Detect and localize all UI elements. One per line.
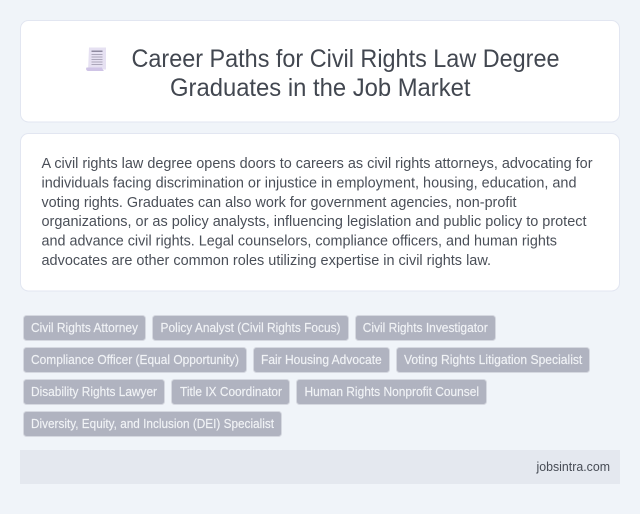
tag: Disability Rights Lawyer: Disability Rights Lawyer — [31, 385, 157, 399]
tag: Civil Rights Attorney — [24, 316, 146, 340]
description text: voting rights. Graduates can also work for government agencies, non-profit — [42, 194, 517, 211]
tag: Human Rights Nonprofit Counsel: Human Rights Nonprofit Counsel — [304, 385, 479, 399]
description text: and advance civil rights. Legal counselors, compliance officers, and human rights — [42, 232, 557, 250]
title: Graduates in the Job Market — [170, 74, 471, 102]
tag: Compliance Officer — [24, 348, 246, 372]
tag: Title IX Coordinator — [172, 380, 290, 404]
description text: advocates are other common roles utilizing expertise in civil rights law. — [42, 252, 491, 269]
tag: Civil Rights Investigator — [356, 316, 496, 340]
tag: DEI Specialist: Diversity, Equity, and Inclusion (DEI) Specialist — [31, 417, 274, 431]
tag: Civil Rights Attorney: Civil Rights Attorney — [31, 321, 139, 335]
tag: DEI Specialist — [24, 412, 282, 436]
description panel — [20, 134, 620, 291]
description text: A civil rights law degree opens doors to careers as civil rights attorneys, advocating for — [42, 155, 592, 172]
tag: Fair Housing Advocate — [254, 348, 390, 372]
tag: Compliance Officer: Compliance Officer (Equal Opportunity) — [31, 353, 239, 367]
description text: individuals facing discrimination or injustice in employment, housing, education, and — [42, 174, 576, 192]
title — [132, 45, 560, 102]
title: Career Paths for Civil Rights Law Degree — [132, 45, 560, 73]
tag: Policy Analyst — [152, 316, 348, 340]
description text — [42, 155, 592, 269]
tag: Civil Rights Investigator: Civil Rights Investigator — [363, 321, 488, 335]
tag: Voting Rights Litigation Specialist — [396, 348, 590, 372]
icon: paper scroll — [86, 48, 106, 71]
job role tags — [24, 316, 590, 436]
tag: Policy Analyst: Policy Analyst (Civil Rights Focus) — [160, 321, 340, 335]
tag: Fair Housing Advocate: Fair Housing Advocate — [261, 353, 382, 367]
tag: Human Rights Nonprofit Counsel — [296, 380, 486, 404]
tag: Voting Rights Litigation Specialist: Voting Rights Litigation Specialist — [404, 353, 583, 367]
description text: organizations, or as policy analysts, influencing legislation and public policy to protect — [42, 213, 587, 230]
footer bar — [20, 450, 620, 484]
tag: Title IX Coordinator: Title IX Coordinator — [180, 385, 282, 399]
header panel — [20, 20, 620, 122]
footer source text: jobsintra.com — [536, 460, 610, 474]
tag: Disability Rights Lawyer — [24, 380, 164, 404]
